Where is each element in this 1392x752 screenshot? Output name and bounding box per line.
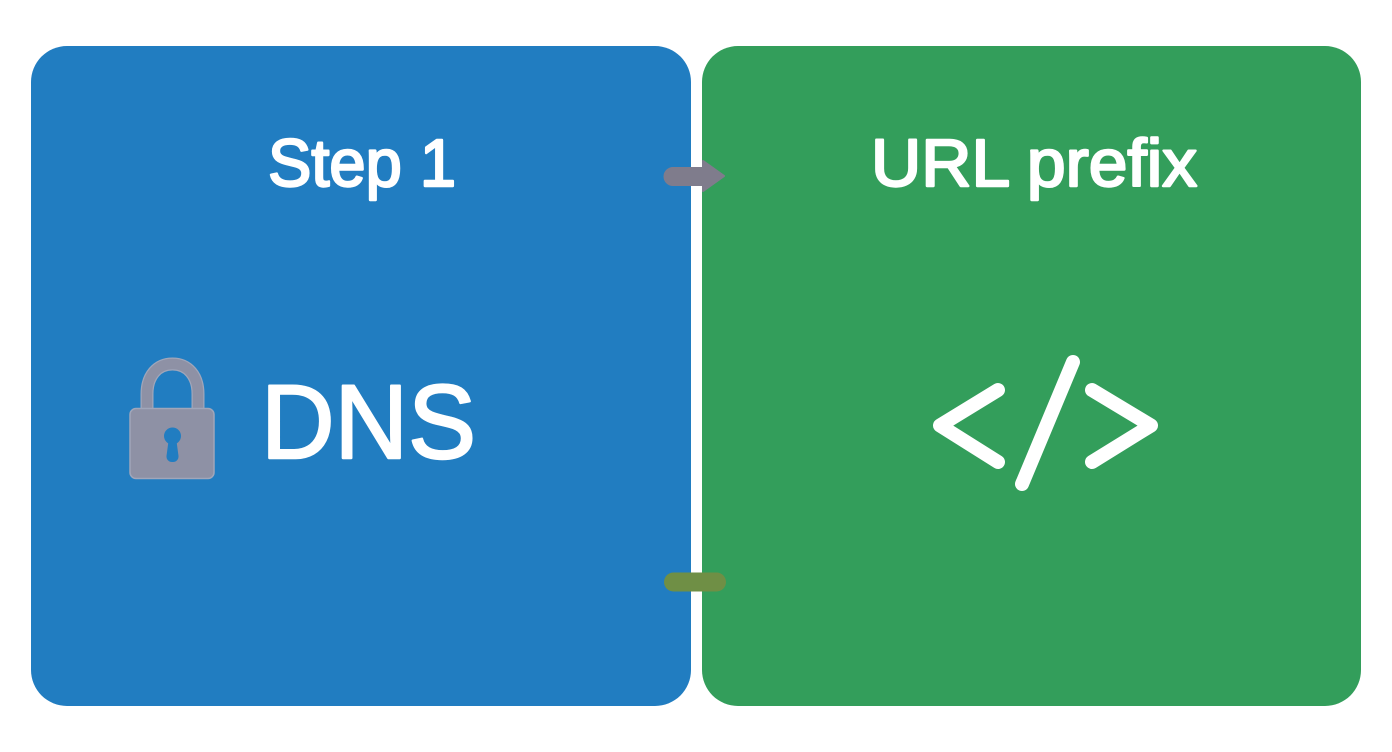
heading: URL prefix: URL prefix bbox=[871, 126, 1197, 201]
heading: Step 1: Step 1 bbox=[268, 126, 456, 201]
label: DNS: DNS bbox=[261, 364, 476, 481]
icon: padlock bbox=[130, 364, 214, 478]
connector: olive bar bbox=[664, 572, 726, 592]
panel: Step 1 DNS bbox=[31, 46, 691, 706]
icon: code brackets bbox=[940, 362, 1151, 484]
panel: URL prefix bbox=[702, 46, 1361, 706]
arrow: gray connector bbox=[664, 161, 724, 191]
